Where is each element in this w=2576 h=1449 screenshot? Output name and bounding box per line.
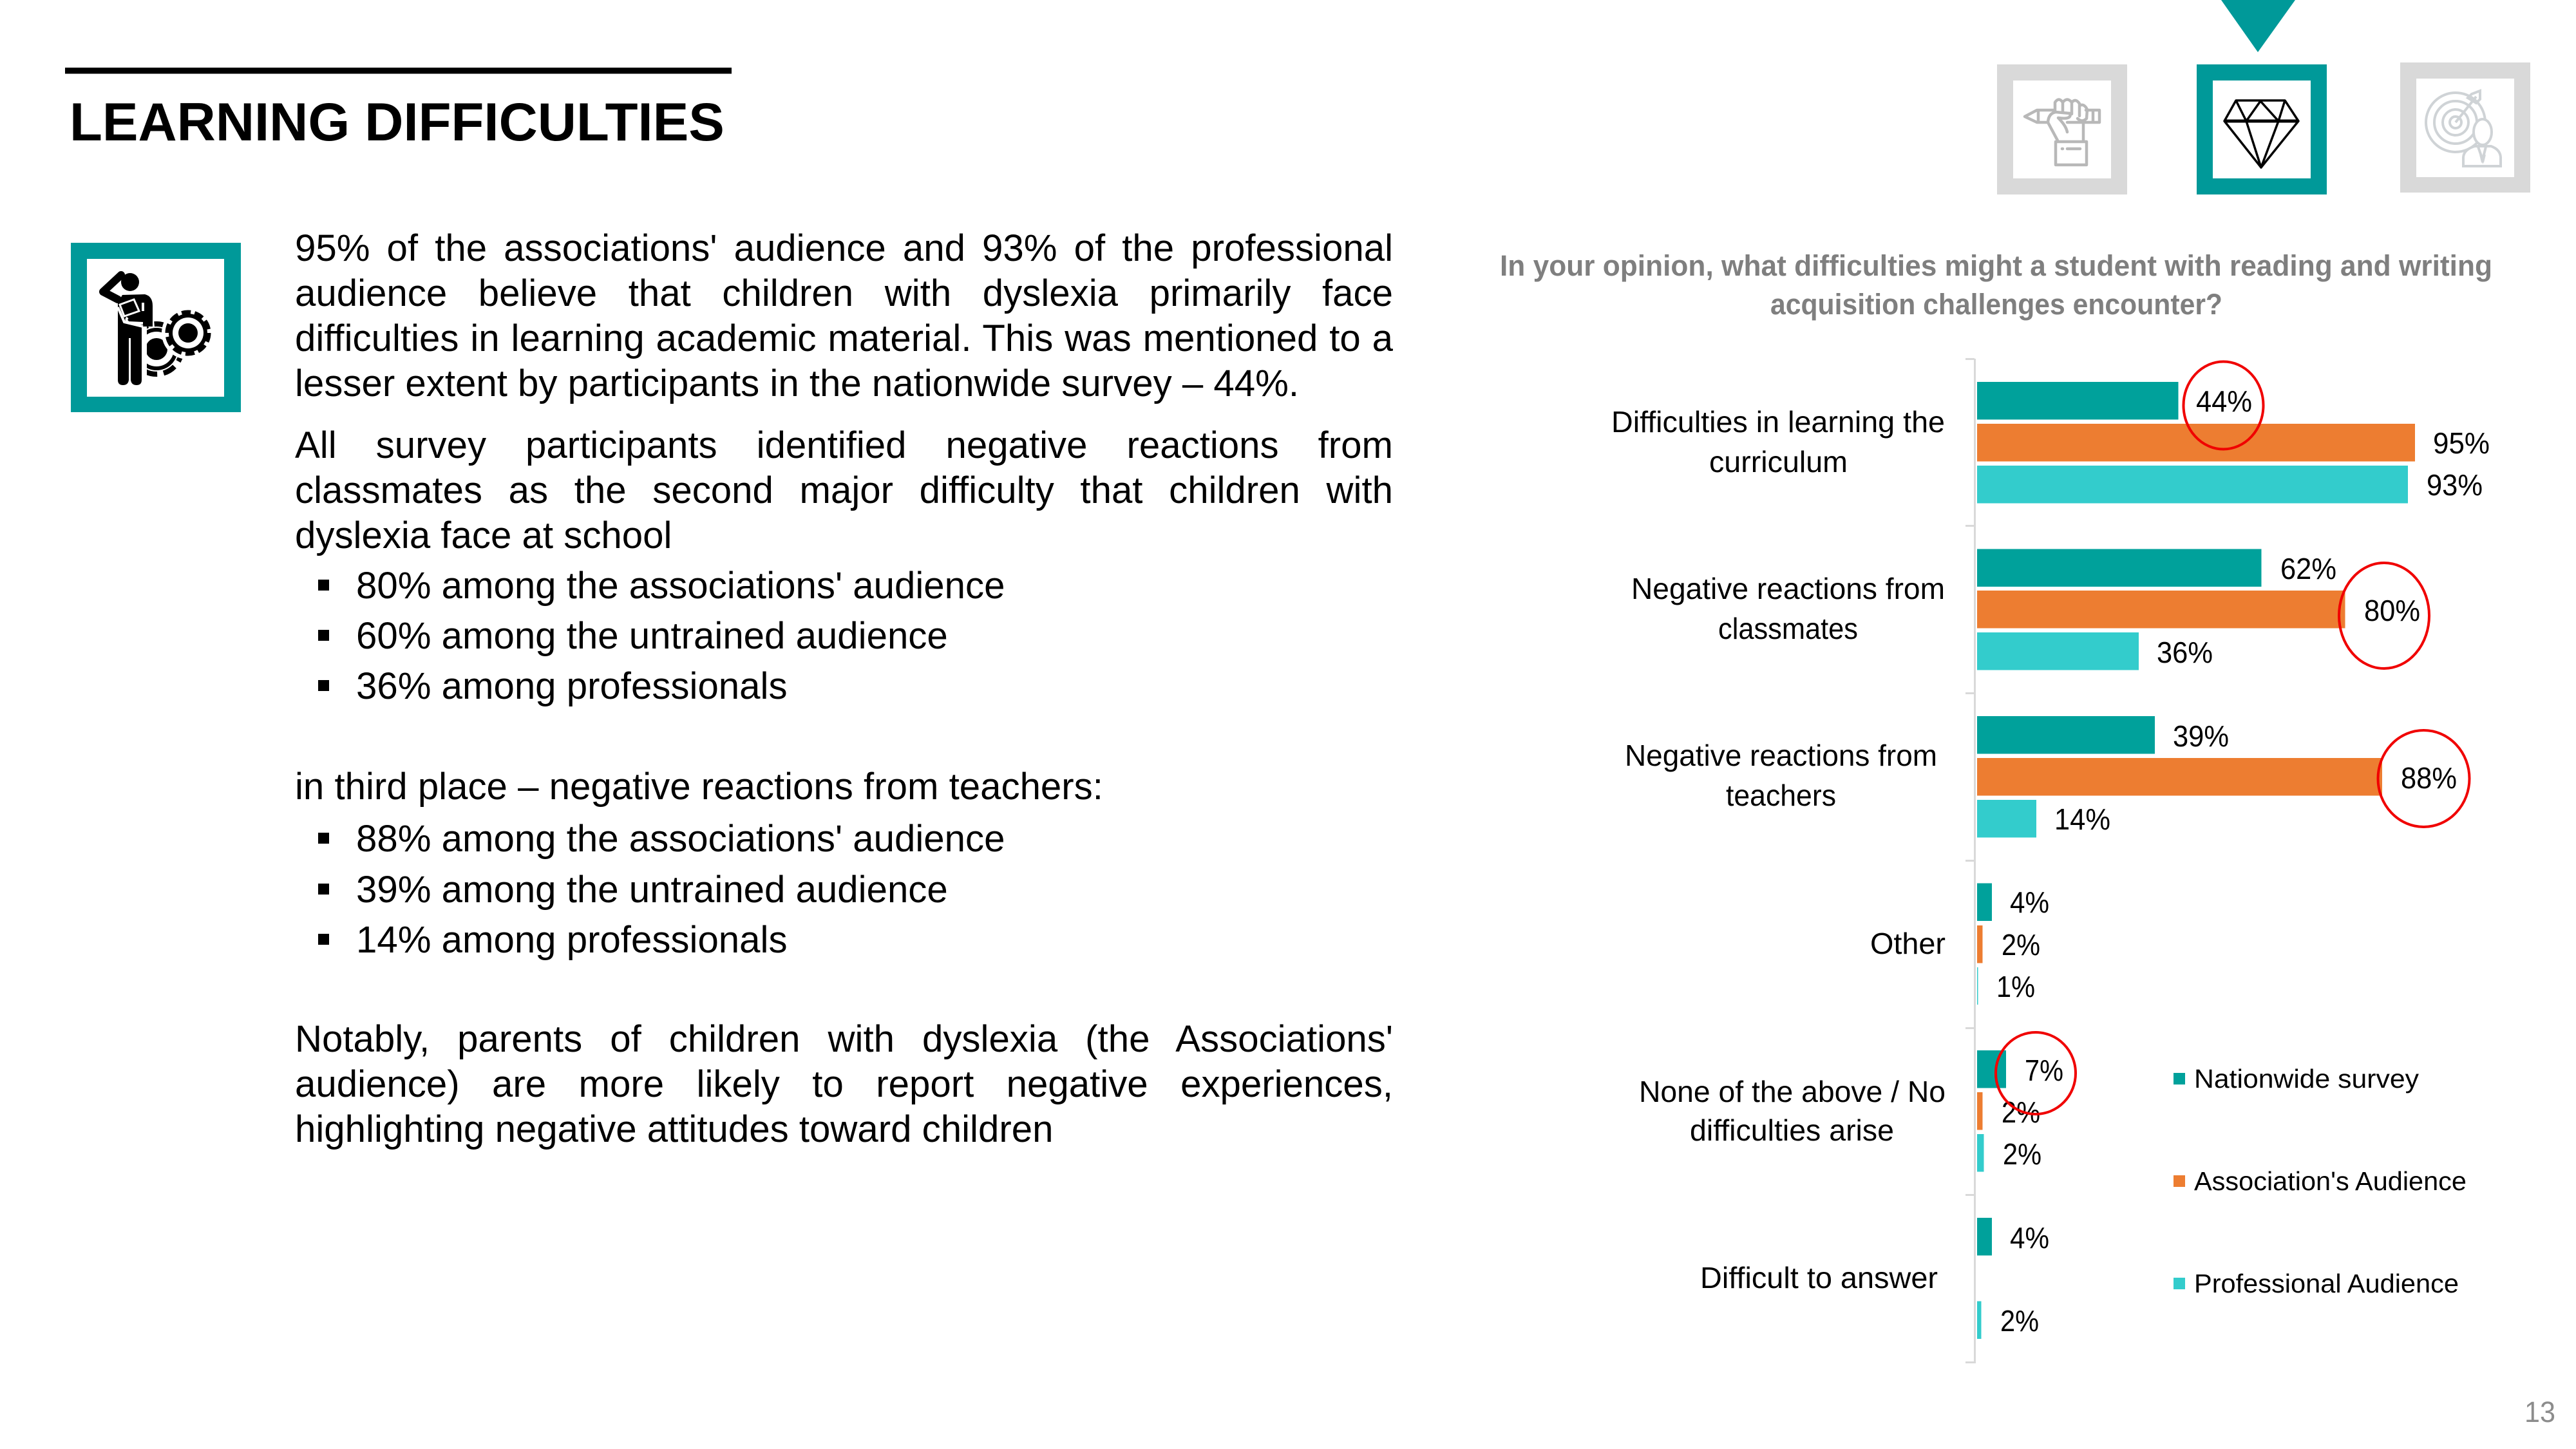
value labels: 14% xyxy=(2054,802,2110,836)
chart legend: Association's Audience xyxy=(2194,1166,2467,1196)
value labels: 2% xyxy=(2000,1304,2039,1338)
body text: closing paragraph xyxy=(295,1018,1393,1150)
body text: first paragraph: 95% of the associations' audience and 93% of the professional xyxy=(295,227,1393,269)
value labels: 62% xyxy=(2280,552,2336,585)
value labels: 80% xyxy=(2364,594,2420,627)
icon: target with person xyxy=(2400,62,2530,193)
category labels: classmates xyxy=(1718,612,1858,645)
category labels: Negative reactions from xyxy=(1631,572,1945,605)
value labels: 7% xyxy=(2025,1054,2063,1087)
body text: second paragraph xyxy=(295,424,1393,556)
value labels: 39% xyxy=(2173,719,2229,753)
value labels: 36% xyxy=(2157,636,2213,669)
chart axis xyxy=(1965,358,1976,1363)
chart legend: Nationwide survey xyxy=(2194,1064,2420,1094)
category labels: Negative reactions from xyxy=(1625,739,1937,772)
category labels: Difficult to answer xyxy=(1700,1261,1938,1294)
category labels: difficulties arise xyxy=(1690,1113,1894,1147)
chart question heading xyxy=(1500,249,2492,321)
bullet list: classmates: 36% among professionals xyxy=(356,665,788,707)
body text: first paragraph: audience believe that children with dyslexia primarily face xyxy=(295,272,1393,314)
chart legend: Professional Audience xyxy=(2194,1269,2459,1298)
icon: fist with pencil xyxy=(1997,64,2127,194)
value labels: 4% xyxy=(2010,1221,2049,1255)
bullet list: teachers xyxy=(318,818,1005,961)
bars: association's audience xyxy=(1977,424,2415,1130)
title rule xyxy=(65,68,732,73)
body text: first paragraph: lesser extent by participants in the nationwide survey – 44%. xyxy=(295,363,1299,404)
icon: person with gears xyxy=(71,243,241,412)
category labels xyxy=(1611,405,1946,1294)
bullet list: teachers: 39% among the untrained audience xyxy=(356,869,948,911)
bars: professional audience xyxy=(1977,466,2408,1339)
body text: closing paragraph: Notably, parents of children with dyslexia (the Associations' xyxy=(295,1018,1393,1060)
value labels: 95% xyxy=(2433,426,2490,460)
chart question heading: acquisition challenges encounter? xyxy=(1770,288,2222,321)
bar chart xyxy=(1611,358,2490,1363)
body text: closing paragraph: highlighting negative attitudes toward children xyxy=(295,1108,1053,1150)
category labels: curriculum xyxy=(1709,445,1848,478)
body text: first paragraph: difficulties in learning academic material. This was mentioned to a xyxy=(295,317,1393,359)
value labels: 2% xyxy=(2002,1095,2040,1129)
highlight circles xyxy=(1996,362,2469,1114)
navigation pointer xyxy=(2221,0,2295,52)
title: LEARNING DIFFICULTIES xyxy=(70,92,724,152)
category labels: teachers xyxy=(1726,779,1836,812)
value labels: 88% xyxy=(2401,761,2457,795)
body text: closing paragraph: audience) are more likely to report negative experiences, xyxy=(295,1063,1393,1105)
value labels: 1% xyxy=(1996,970,2035,1003)
page number: 13 xyxy=(2524,1396,2555,1428)
bullet list: teachers: 14% among professionals xyxy=(356,919,788,961)
bars: nationwide survey xyxy=(1977,382,2262,1256)
value labels: 4% xyxy=(2010,886,2049,919)
body text: second paragraph: All survey participants identified negative reactions from xyxy=(295,424,1393,466)
value labels: 44% xyxy=(2196,384,2252,418)
bullet list: classmates xyxy=(318,565,1005,707)
chart question heading: In your opinion, what difficulties might a student with reading and writing xyxy=(1500,249,2492,282)
bullet list: classmates: 80% among the associations' audience xyxy=(356,565,1005,607)
body text: second paragraph: classmates as the second major difficulty that children with xyxy=(295,469,1393,511)
icon: diamond (active) xyxy=(2197,64,2327,194)
value labels: 93% xyxy=(2427,468,2483,502)
body text: first paragraph xyxy=(295,227,1393,404)
bullet list: teachers: 88% among the associations' audience xyxy=(356,818,1005,860)
body text: second paragraph: dyslexia face at school xyxy=(295,515,672,556)
category labels: Other xyxy=(1870,927,1946,960)
category labels: Difficulties in learning the xyxy=(1611,405,1945,439)
value labels xyxy=(1996,384,2490,1338)
chart legend xyxy=(2174,1064,2467,1298)
body text: third place heading: in third place – negative reactions from teachers: xyxy=(295,766,1103,808)
value labels: 2% xyxy=(2003,1137,2041,1171)
bullet list: classmates: 60% among the untrained audience xyxy=(356,615,948,657)
value labels: 2% xyxy=(2002,928,2040,961)
category labels: None of the above / No xyxy=(1639,1075,1946,1108)
